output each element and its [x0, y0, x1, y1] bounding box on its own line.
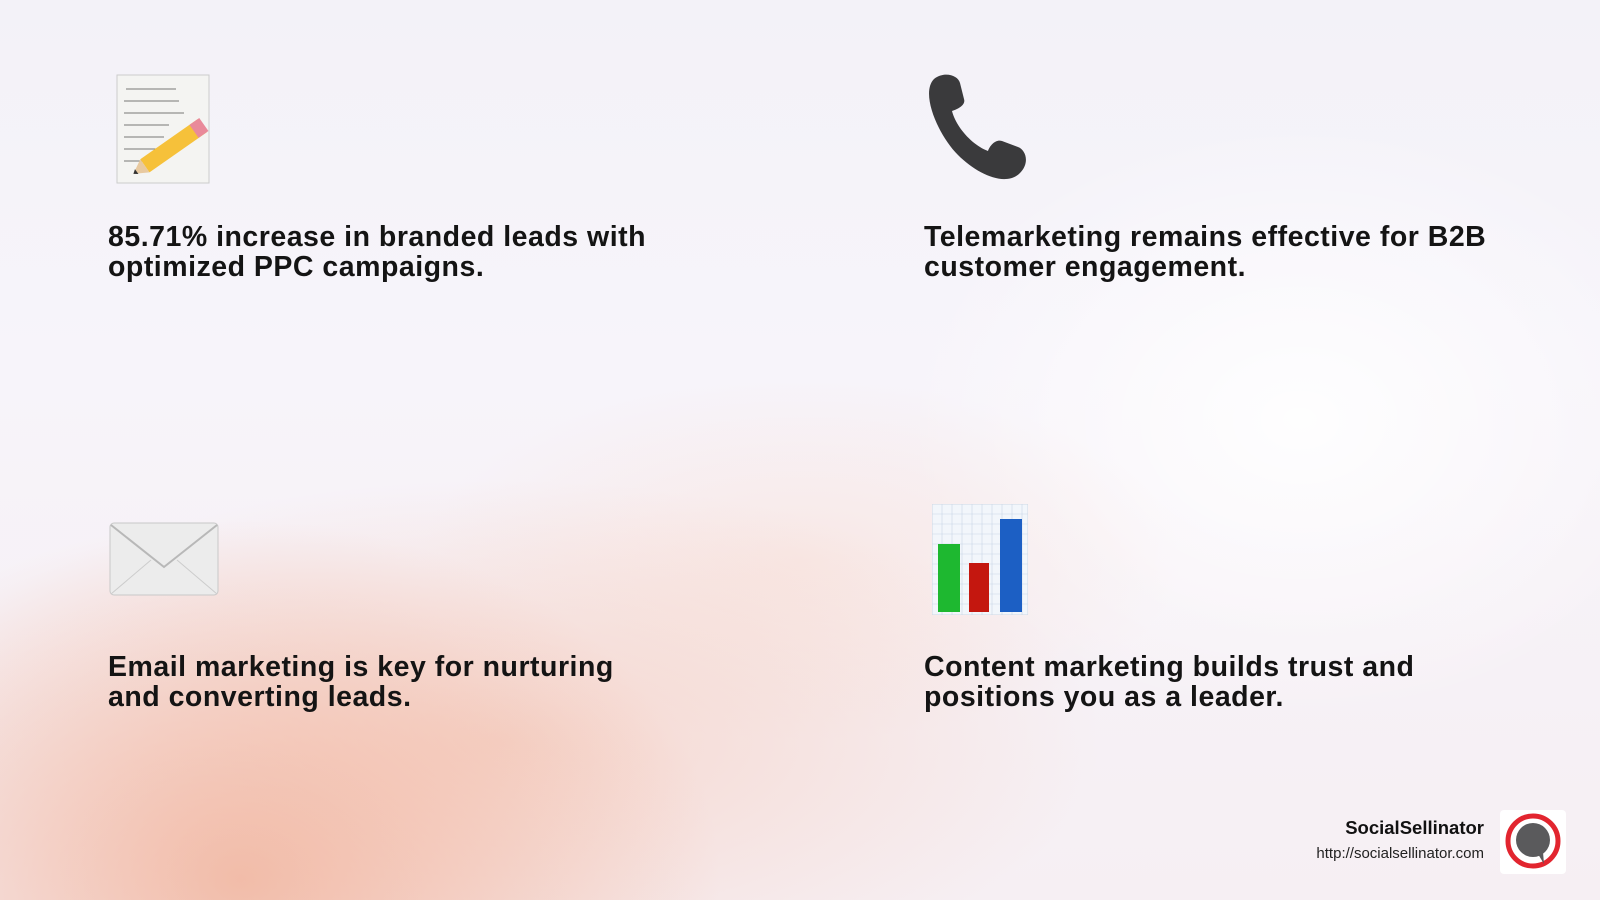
text: content: Content marketing builds trust and — [924, 651, 1414, 683]
text: content: positions you as a leader. — [924, 681, 1284, 713]
brand url: http://socialsellinator.com — [1316, 845, 1484, 862]
text: telemarketing: Telemarketing remains effective for B2B — [924, 221, 1486, 253]
text: telemarketing — [924, 221, 1486, 283]
text: PPC: 85.71% increase in branded leads with — [108, 221, 646, 253]
text: email: Email marketing is key for nurturing — [108, 651, 614, 683]
icon: memo with pencil — [116, 74, 210, 184]
text: content — [924, 651, 1414, 713]
text: telemarketing: customer engagement. — [924, 251, 1246, 283]
text: PPC: optimized PPC campaigns. — [108, 251, 484, 283]
icon: telephone receiver — [929, 74, 1026, 180]
text: PPC — [108, 221, 646, 283]
brand footer — [1316, 810, 1566, 874]
logo — [1500, 810, 1566, 874]
icon: bar chart — [932, 504, 1028, 615]
text: email — [108, 651, 614, 713]
brand name: SocialSellinator — [1345, 817, 1484, 838]
icon: envelope — [110, 522, 218, 596]
text: email: and converting leads. — [108, 681, 412, 713]
